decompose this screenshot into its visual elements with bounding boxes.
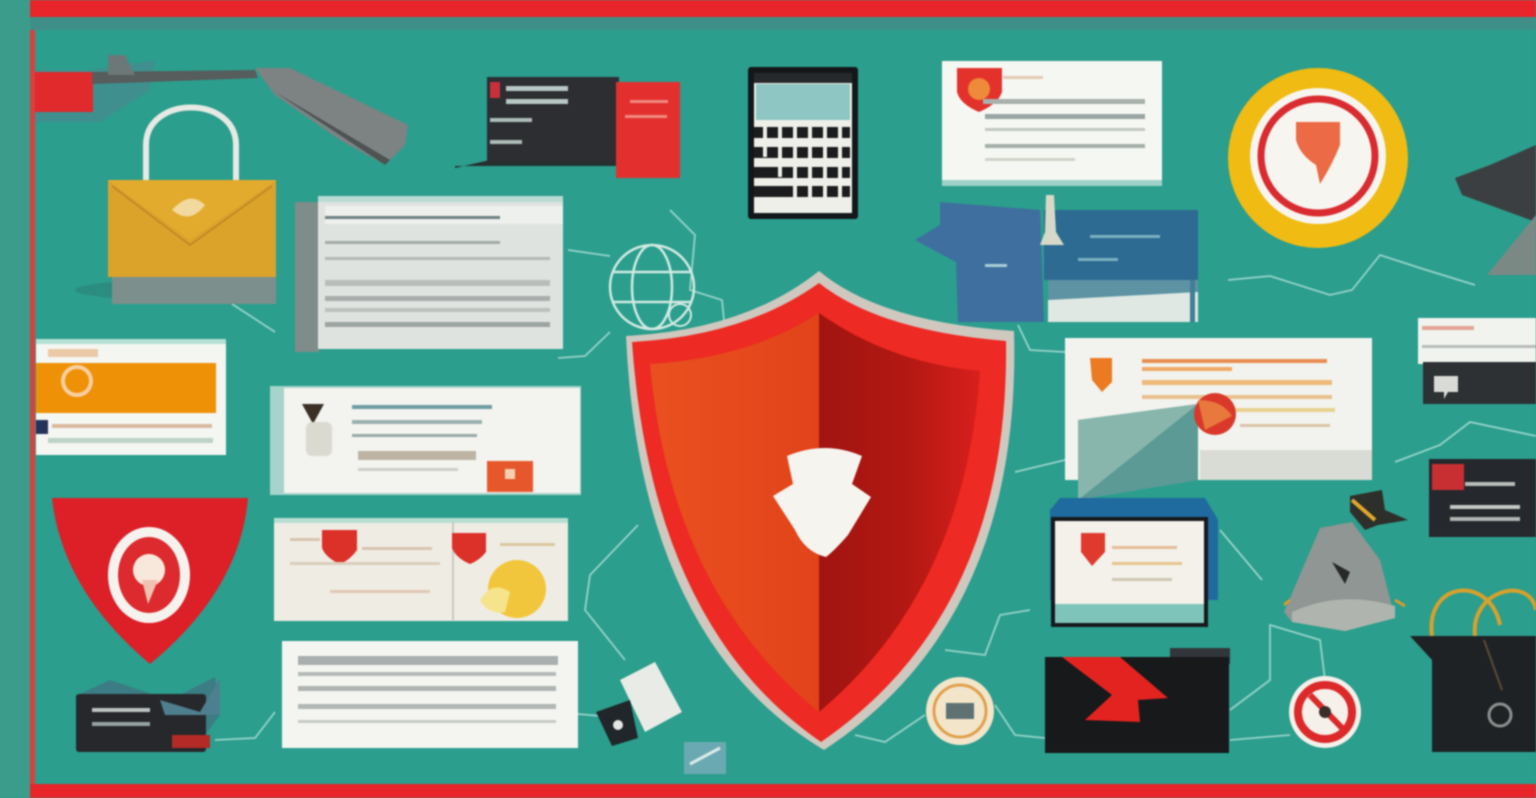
card: orange panel (36, 339, 226, 455)
icon: wireframe globe (610, 245, 694, 329)
card: large grey document (295, 196, 563, 352)
shield left half (650, 313, 819, 712)
connector lines (215, 210, 1536, 742)
icon: dark folder card bottom left (76, 677, 220, 752)
card: report with orange lines (1065, 338, 1372, 500)
icon: tied sack (1284, 490, 1408, 631)
shield right half (819, 313, 980, 712)
shield emblem (773, 448, 871, 557)
icon: calculator (748, 67, 858, 219)
main shield (626, 271, 1014, 750)
icon: grey object at right edge (1455, 145, 1536, 275)
icon: dark folder with red arrow (1045, 648, 1230, 753)
card: blue folded chat panels (915, 195, 1198, 322)
icon: black bag with gold handles (1410, 591, 1536, 752)
icon: round seal (926, 677, 994, 745)
card: white note with badge (270, 386, 581, 495)
shield soft outline (626, 271, 1014, 750)
icon: prohibition sign (1289, 676, 1361, 748)
card: dark note right (1429, 459, 1536, 537)
icon: yellow target badge (1228, 68, 1408, 248)
icon: padlock envelope (75, 108, 276, 304)
card: coin note (274, 518, 568, 621)
icon: pen tool top left (35, 55, 408, 165)
card: dark note with red tag (455, 77, 680, 178)
card: long text document (282, 641, 578, 748)
card: right edge note (1418, 318, 1536, 404)
card: white document with red badge (942, 61, 1162, 186)
shield red rim (632, 283, 1006, 742)
icon: key card (596, 662, 726, 774)
icon: red shield badge (52, 498, 248, 664)
card: framed note on blue backing (1050, 498, 1218, 627)
